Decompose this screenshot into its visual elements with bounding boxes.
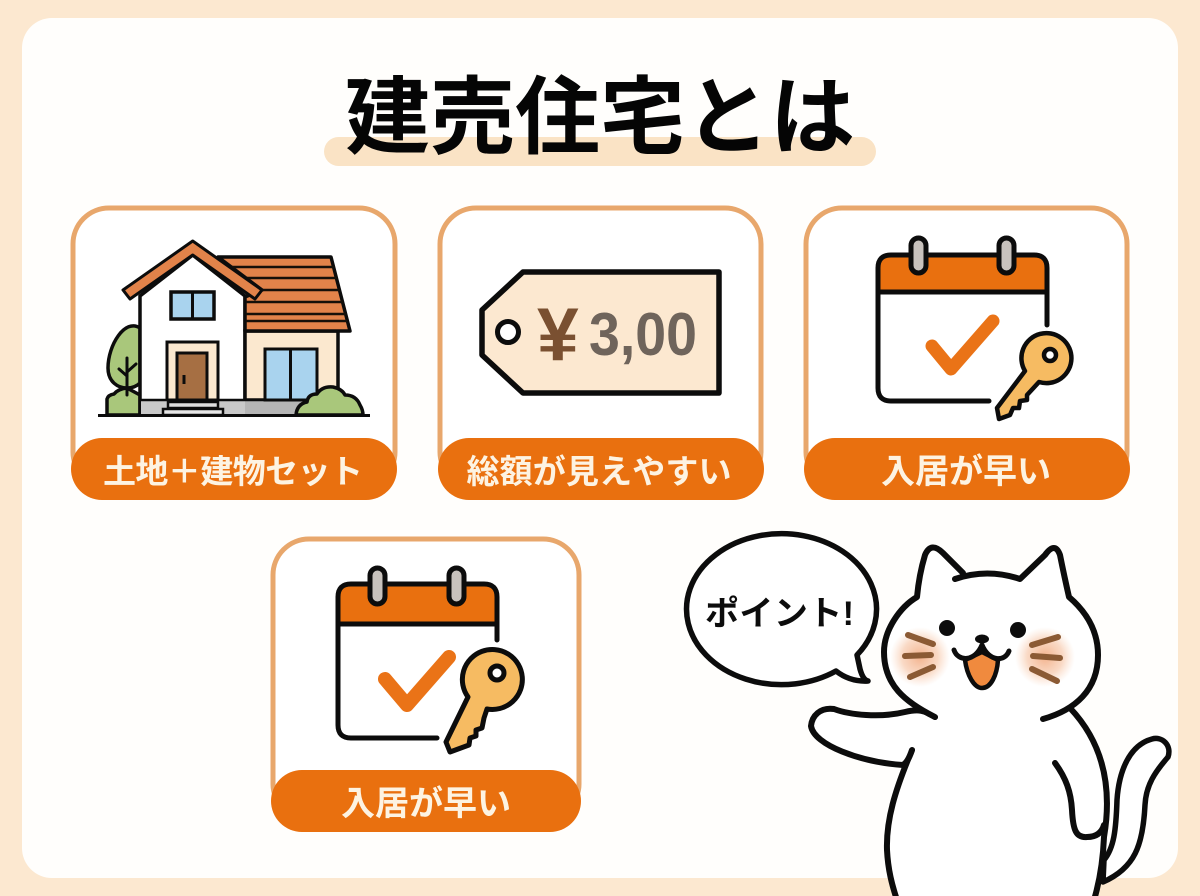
icon: house	[98, 241, 370, 416]
label: total price: 総額が見えやすい	[466, 453, 732, 490]
icon: price tag: ¥	[537, 292, 579, 376]
label: quick move-in second: 入居が早い	[341, 784, 511, 823]
icon: calendar and key	[878, 238, 1071, 419]
cat eyes	[939, 620, 1026, 638]
label: land and building set: 土地＋建物セット	[103, 453, 363, 490]
cat arm pointing	[811, 709, 935, 765]
icon: price tag	[482, 272, 719, 393]
icon: calendar and key second	[338, 568, 522, 752]
cat whiskers	[905, 635, 1060, 681]
cat tail	[1103, 738, 1169, 882]
panel: quick move-in second	[271, 539, 581, 832]
cat body	[887, 700, 1107, 896]
label: total price	[438, 438, 764, 500]
label: land and building set	[71, 438, 397, 500]
panel: total price	[438, 208, 764, 500]
cat character	[811, 547, 1169, 896]
cat head	[884, 547, 1098, 719]
icon: price tag: 3,00	[589, 301, 697, 368]
label: quick move-in second	[271, 770, 581, 832]
label: quick move-in: 入居が早い	[881, 452, 1051, 491]
panel: land and building set	[71, 208, 397, 500]
cat right arm	[1055, 763, 1104, 837]
title: 建売住宅とは	[345, 71, 855, 166]
panel: quick move-in	[804, 208, 1130, 500]
cat blush	[890, 627, 1075, 687]
speech bubble	[687, 534, 877, 685]
cat mouth	[954, 634, 1009, 688]
label: quick move-in	[804, 438, 1130, 500]
speech bubble: ポイント!	[705, 595, 854, 633]
